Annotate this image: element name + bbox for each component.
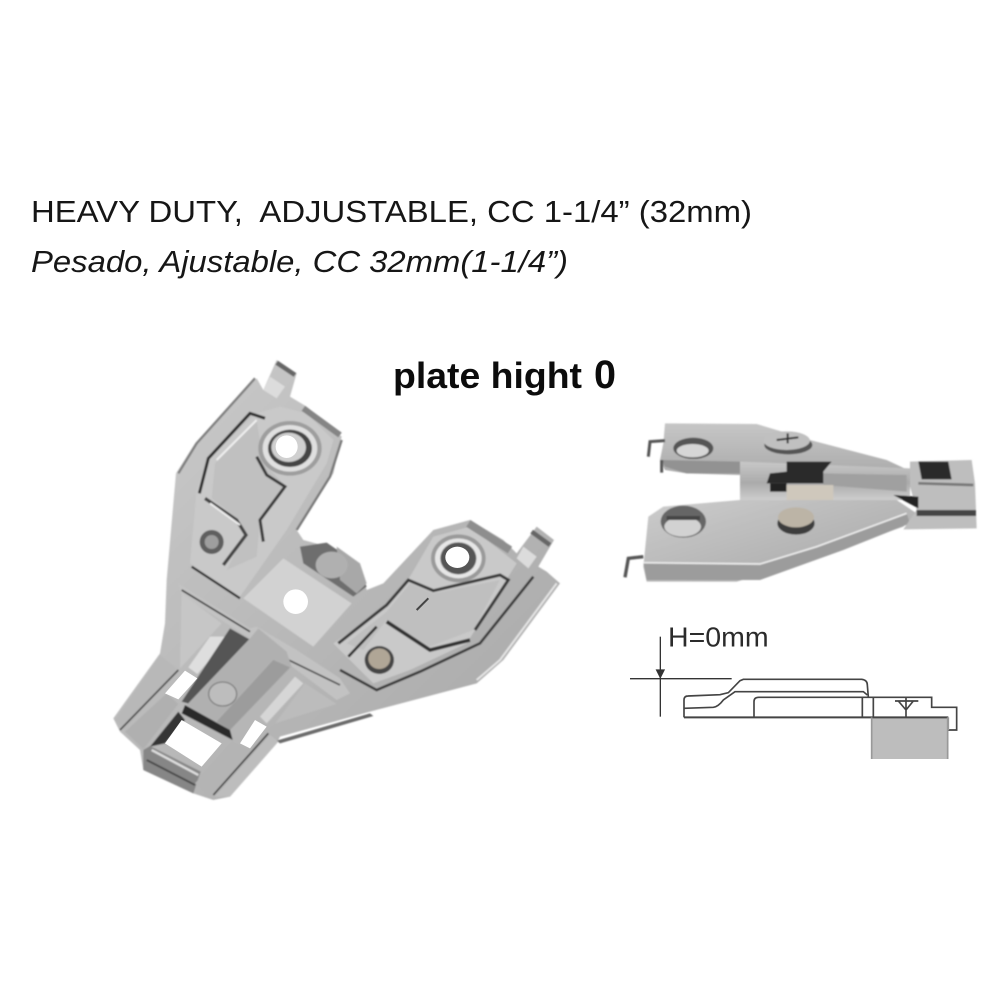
window frame shadow xyxy=(150,712,185,747)
small rivet xyxy=(200,530,224,554)
lower countersink xyxy=(661,506,706,538)
dimension arrow xyxy=(630,637,732,717)
right triangular panel xyxy=(275,683,337,723)
upper arm stamped lines xyxy=(199,413,265,493)
large hinge plate photo xyxy=(113,360,560,800)
crossbar xyxy=(178,583,350,700)
small stamped mark xyxy=(417,598,428,610)
heading: spanish: Pesado, Ajustable, CC 32mm(1-1/4”) xyxy=(31,244,568,279)
plate silhouette xyxy=(113,360,560,800)
right end block xyxy=(903,460,977,529)
triangular stamped panel left xyxy=(180,593,222,668)
mounting holes xyxy=(165,435,469,767)
right countersink xyxy=(431,534,486,582)
right arm stamped lines xyxy=(338,575,508,643)
left hooks xyxy=(648,441,665,473)
tab details xyxy=(277,363,295,375)
cabinet block xyxy=(872,717,948,759)
upper arm raised panel xyxy=(212,420,287,570)
upper wing xyxy=(660,423,907,480)
barrel front shadow xyxy=(182,705,233,740)
right clamp block xyxy=(195,742,247,797)
dark channel xyxy=(182,628,249,704)
top-view hinge plate photo xyxy=(625,423,977,582)
upper arm inner panel xyxy=(190,407,333,597)
label: plate height: plate hight xyxy=(393,355,582,396)
side section diagram xyxy=(630,622,957,759)
lower wing xyxy=(643,500,917,582)
central barrel xyxy=(740,462,910,500)
upper countersink xyxy=(673,438,713,459)
lower rivet xyxy=(365,646,394,674)
underside shadow xyxy=(277,713,373,743)
barrel xyxy=(187,628,292,730)
left clamp block xyxy=(125,693,178,749)
light slot xyxy=(188,637,230,674)
hinge profile xyxy=(684,679,957,759)
lower clamp bar xyxy=(143,746,201,793)
rivet xyxy=(777,512,815,535)
lower section detail xyxy=(115,583,373,797)
heading: english: HEAVY DUTY, ADJUSTABLE, CC 1-1/4” (32mm) xyxy=(31,194,752,229)
label: plate height: 0 xyxy=(594,353,616,397)
upper countersink xyxy=(258,421,322,476)
left clamp leg xyxy=(115,655,177,730)
screw xyxy=(764,436,812,454)
dimension label: H=0mm xyxy=(668,622,769,653)
right arm inner panel xyxy=(333,527,517,683)
center bracket xyxy=(243,558,352,647)
